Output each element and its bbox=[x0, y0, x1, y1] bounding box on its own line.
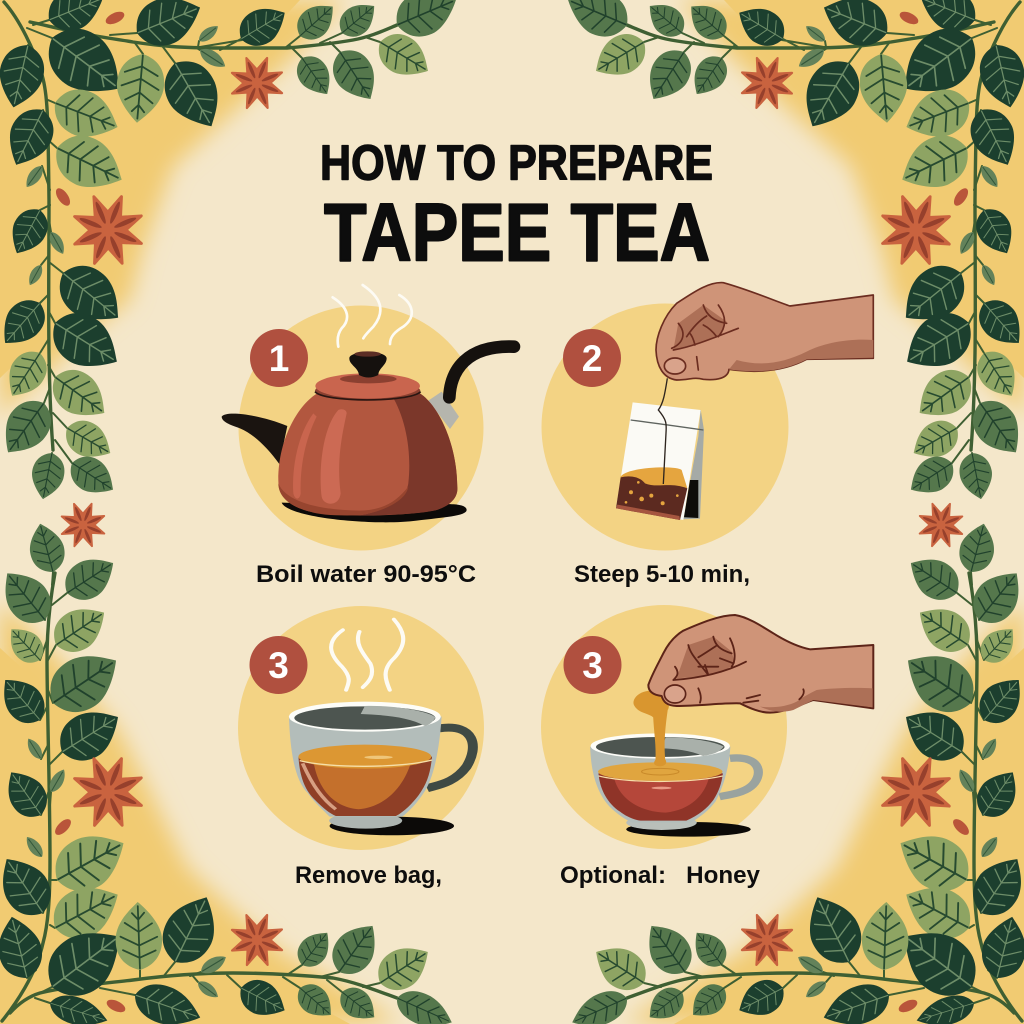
icon: tea bag bbox=[616, 378, 704, 520]
icon: steam bbox=[331, 619, 403, 690]
icon: hand holding honey spoon bbox=[648, 615, 873, 713]
badge: number 1 bbox=[250, 329, 308, 387]
step 4: optional honey bbox=[541, 605, 873, 889]
title bbox=[320, 136, 713, 278]
step 1: boil water bbox=[222, 285, 514, 588]
caption: remove bag: Remove bag, bbox=[295, 862, 442, 889]
title: TAPEE TEA bbox=[324, 188, 710, 278]
step 3: remove bag bbox=[238, 606, 484, 889]
badge: number 3: 3 bbox=[268, 645, 289, 686]
icon: honey drip bbox=[633, 691, 669, 766]
icon: hand holding string bbox=[656, 283, 873, 380]
caption: boil water: Boil water 90-95°C bbox=[256, 561, 476, 588]
caption: steep: Steep 5-10 min, bbox=[574, 561, 750, 588]
badge: number 3 bbox=[250, 636, 308, 694]
badge: number 1: 1 bbox=[269, 338, 289, 379]
icon: red kettle bbox=[222, 285, 514, 522]
title: HOW TO PREPARE bbox=[320, 136, 713, 190]
badge: number 2 bbox=[563, 329, 621, 387]
foliage border: right bbox=[560, 0, 1024, 1024]
step 2: steep bbox=[542, 283, 873, 588]
foliage border: left bbox=[0, 0, 464, 1024]
icon: cup with honey tea bbox=[590, 733, 758, 837]
badge: number 3 bbox=[564, 636, 622, 694]
icon: glass cup of tea with steam bbox=[289, 702, 473, 835]
badge: number 2: 2 bbox=[582, 338, 602, 379]
badge: number 3: 3 bbox=[582, 645, 603, 686]
caption: optional honey: Optional: Honey bbox=[560, 862, 760, 889]
